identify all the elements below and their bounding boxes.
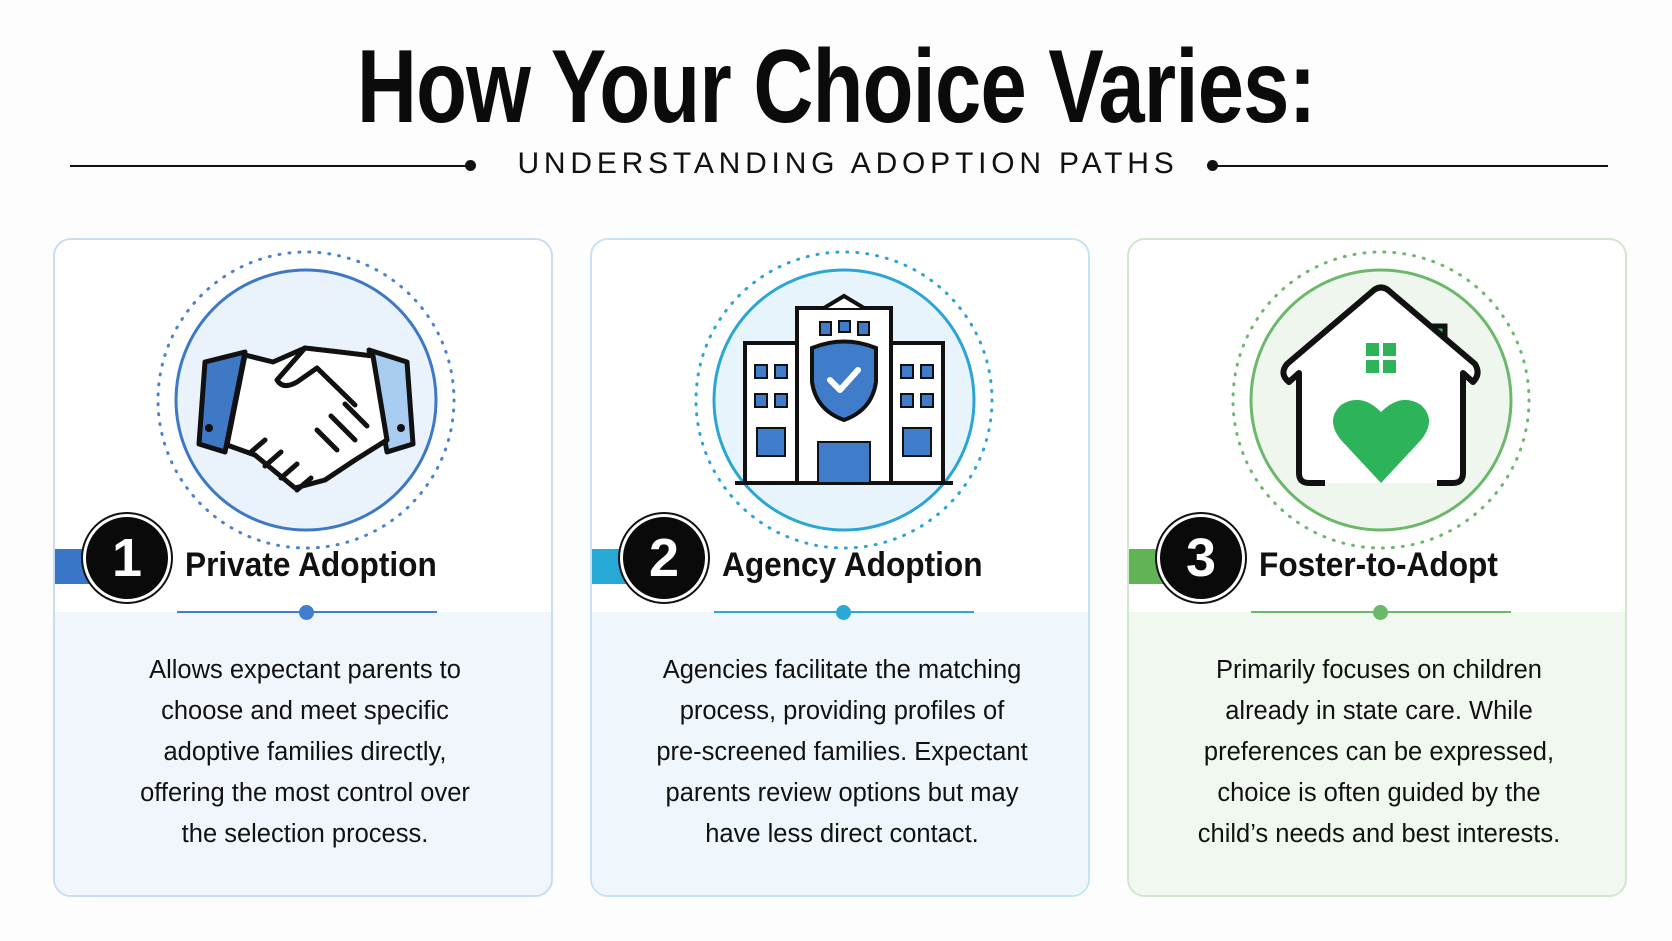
body text: parents review options but may xyxy=(666,779,1018,807)
body text: Agencies facilitate the matching xyxy=(663,656,1021,684)
title: How Your Choice Varies: xyxy=(357,29,1315,145)
panel: private adoption: 1 xyxy=(112,528,142,588)
icon: building with shield xyxy=(694,250,994,550)
body text: Allows expectant parents to xyxy=(149,656,461,684)
heading: Agency Adoption xyxy=(722,546,983,584)
body text: the selection process. xyxy=(182,820,428,848)
panel: private adoption xyxy=(53,238,553,897)
panel: agency adoption: 2 xyxy=(649,528,679,588)
body text: already in state care. While xyxy=(1225,697,1533,725)
body text: adoptive families directly, xyxy=(164,738,446,766)
icon: house with heart xyxy=(1232,250,1530,550)
body text: process, providing profiles of xyxy=(680,697,1004,725)
body text xyxy=(1198,656,1560,848)
number badge 2 xyxy=(592,512,710,604)
body text: offering the most control over xyxy=(140,779,470,807)
body text: child’s needs and best interests. xyxy=(1198,820,1560,848)
heading: Private Adoption xyxy=(185,546,437,584)
body text xyxy=(656,656,1028,848)
body text xyxy=(140,656,470,848)
body text: pre-screened families. Expectant xyxy=(656,738,1028,766)
body text: preferences can be expressed, xyxy=(1204,738,1554,766)
body text: Primarily focuses on children xyxy=(1216,656,1542,684)
subtitle: UNDERSTANDING ADOPTION PATHS xyxy=(517,147,1179,180)
icon: handshake xyxy=(156,250,456,550)
number badge 3 xyxy=(1129,512,1247,604)
heading: Foster-to-Adopt xyxy=(1259,546,1498,584)
panel: agency adoption xyxy=(590,238,1090,897)
number badge 1 xyxy=(55,512,173,604)
panel: foster-to-adopt xyxy=(1127,238,1627,897)
panel: foster-to-adopt: 3 xyxy=(1186,528,1216,588)
body text: have less direct contact. xyxy=(705,820,979,848)
body text: choose and meet specific xyxy=(161,697,449,725)
body text: choice is often guided by the xyxy=(1217,779,1541,807)
